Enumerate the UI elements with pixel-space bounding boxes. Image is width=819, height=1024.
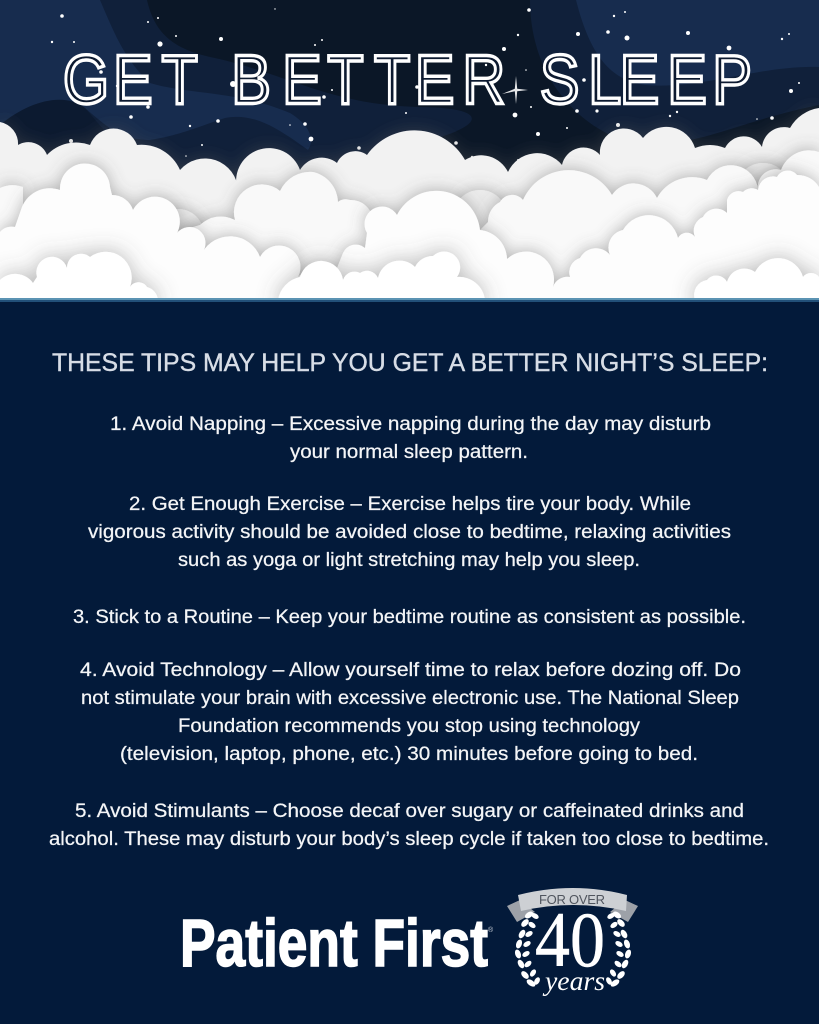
tip 5: 5. Avoid Stimulants – Choose decaf over sugary or caffeinated drinks and <box>75 801 744 822</box>
tip 2: vigorous activity should be avoided close to bedtime, relaxing activities <box>88 522 731 543</box>
middle cloud layer <box>0 142 819 248</box>
clouds <box>0 108 819 310</box>
title <box>63 40 752 119</box>
tip 3: 3. Stick to a Routine – Keep your bedtime routine as consistent as possible. <box>73 607 746 628</box>
badge: for over 40 years <box>507 888 638 996</box>
laurel wreath <box>514 910 632 988</box>
back-middle cloud puffs <box>170 154 784 224</box>
stars <box>51 8 800 173</box>
tip 4: 4. Avoid Technology – Allow yourself time to relax before dozing off. Do <box>80 660 741 681</box>
ribbon: FOR OVER <box>539 892 605 907</box>
back cloud layer <box>0 106 819 224</box>
tip 2: such as yoga or light stretching may help you sleep. <box>178 550 640 571</box>
tip 2 <box>88 494 731 571</box>
tip 4: Foundation recommends you stop using technology <box>178 716 641 737</box>
panel: tips background <box>0 298 819 1024</box>
title: GET <box>63 40 198 119</box>
tip 2: 2. Get Enough Exercise – Exercise helps tire your body. While <box>129 494 691 515</box>
heading: THESE TIPS MAY HELP YOU GET A BETTER NIGHT’S SLEEP: <box>52 349 768 377</box>
title: BETTER <box>231 40 505 119</box>
title: SLEEP <box>540 40 752 119</box>
tip 4: not stimulate your brain with excessive electronic use. The National Sleep <box>81 688 739 709</box>
tip 5: alcohol. These may disturb your body’s sleep cycle if taken too close to bedtime. <box>49 829 769 850</box>
logo: Patient First: ® <box>488 926 494 934</box>
tip 1 <box>110 414 711 463</box>
tip 4 <box>80 660 741 765</box>
icon: sparkle star <box>502 76 528 104</box>
panel: night sky <box>0 0 819 300</box>
number 40: 40 <box>535 896 605 983</box>
front cloud layer <box>0 163 819 310</box>
tip 4: (television, laptop, phone, etc.) 30 minutes before going to bed. <box>120 744 698 765</box>
foreground cloud layer <box>0 251 819 310</box>
tip 1: your normal sleep pattern. <box>290 442 528 463</box>
years label: years <box>542 966 605 996</box>
tip 5 <box>49 801 769 850</box>
logo: Patient First: Patient First <box>180 906 488 981</box>
tip 1: 1. Avoid Napping – Excessive napping during the day may disturb <box>110 414 711 435</box>
